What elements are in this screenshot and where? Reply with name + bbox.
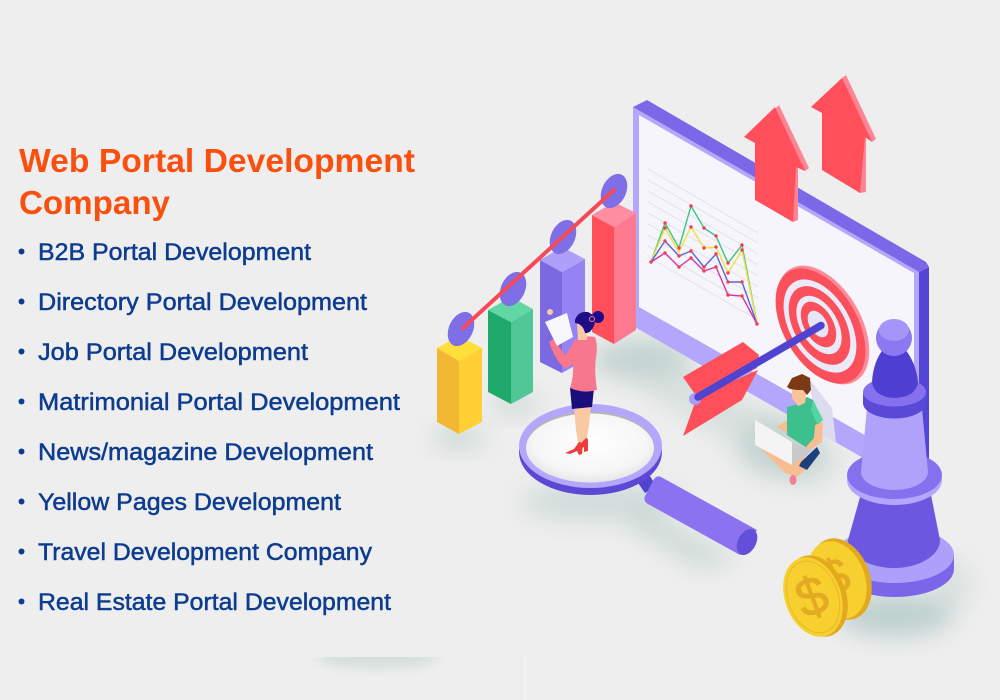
target: [757, 250, 888, 400]
purple bar: [540, 216, 585, 373]
magnifying glass: [519, 404, 762, 559]
shorts: [799, 447, 820, 470]
sleeve: [811, 400, 823, 424]
service list: Job Portal Development: [38, 339, 308, 366]
icon: red up arrow left: [744, 105, 809, 222]
hair: [787, 374, 811, 395]
collar: [847, 451, 942, 505]
front coin: $: [788, 564, 836, 630]
icon: red up arrow right: [811, 75, 876, 193]
green bar: [488, 268, 533, 404]
legs: [760, 448, 812, 477]
chess piece: [836, 319, 954, 597]
service list: Matrimonial Portal Development: [38, 389, 400, 416]
hand: [547, 309, 553, 315]
service list: B2B Portal Development: [38, 239, 311, 266]
hair tie: [590, 316, 594, 322]
red heels: [565, 438, 588, 455]
shirt: [787, 397, 823, 448]
service list: Yellow Pages Development: [38, 489, 341, 516]
title: [19, 142, 415, 221]
face: [792, 388, 807, 406]
trend line: [463, 190, 614, 328]
arm: [806, 422, 823, 450]
pink shoe: [790, 475, 796, 485]
skirt: [570, 388, 594, 409]
legs: [574, 406, 591, 448]
back coin: $: [812, 546, 857, 608]
neck and face: [577, 322, 587, 340]
left arm: [777, 420, 788, 434]
service list: News/magazine Development: [38, 439, 373, 466]
bun: [592, 311, 604, 323]
ball: [876, 319, 912, 356]
service list: Travel Development Company: [38, 539, 372, 566]
arrow in target: [683, 326, 821, 436]
base: [836, 527, 954, 597]
coins: [773, 530, 883, 645]
neck ring: [863, 378, 926, 418]
dome: [872, 348, 918, 398]
laptop: [755, 420, 812, 465]
title: Web Portal Development: [19, 142, 415, 179]
floor shadows: [318, 340, 972, 700]
paper: [545, 313, 573, 346]
monitor: [633, 100, 932, 490]
boy with laptop: [755, 374, 836, 485]
hair: [575, 312, 595, 333]
line chart on screen: [648, 169, 759, 326]
upper body: [861, 408, 928, 490]
wall shadow: [810, 380, 836, 442]
red bar: [592, 170, 636, 344]
title: Company: [19, 184, 171, 221]
yellow bar: [437, 308, 482, 434]
bar chart with trend line: [437, 170, 636, 434]
service list: Directory Portal Development: [38, 289, 367, 316]
jacket with raised arm: [549, 336, 597, 392]
service list: Real Estate Portal Development: [38, 589, 391, 616]
service list: [18, 239, 400, 616]
woman holding paper: [545, 309, 604, 455]
lower body: [848, 490, 940, 568]
